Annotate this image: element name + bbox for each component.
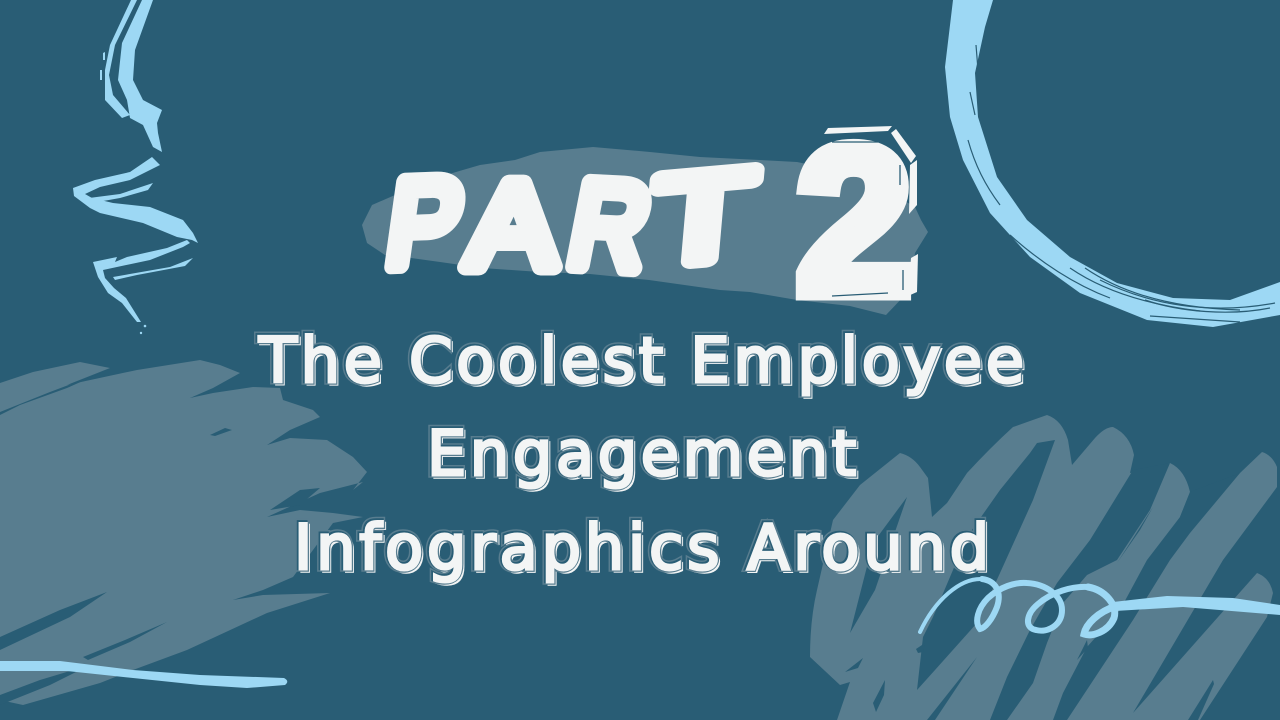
title line 3: Infographics Around	[296, 513, 991, 586]
brush gaps: bottom left	[0, 372, 320, 705]
title line 2: Engagement	[426, 416, 855, 489]
title line 1: shadow, outline, fill: The Coolest Employee	[257, 323, 1023, 396]
title line 2: Engagement	[427, 417, 856, 490]
heading: PART: A	[464, 156, 562, 293]
title line 3: Infographics Around	[293, 510, 988, 583]
title line 1: shadow, outline, fill: The Coolest Employee	[260, 326, 1026, 399]
title line 3: Infographics Around	[293, 510, 988, 583]
swirl line: bottom right	[916, 579, 1280, 653]
heading: PART: P	[379, 154, 470, 293]
circle dry-brush streaks	[968, 45, 1275, 322]
title line 3: Infographics Around	[294, 511, 989, 584]
numeral bevels	[824, 126, 918, 296]
swirl droplet	[916, 643, 925, 653]
title line 2: Engagement	[429, 419, 858, 492]
scribble: bottom right	[810, 415, 1277, 720]
squiggle upper strands	[118, 0, 162, 152]
heading: numeral 2: 2	[796, 103, 912, 338]
brush stroke: behind PART 2	[362, 147, 928, 315]
heading: PART: T	[648, 145, 759, 291]
heading: PART: R	[559, 156, 661, 295]
scribble gaps	[845, 440, 1240, 720]
title line 1: shadow, outline, fill: The Coolest Employee	[258, 324, 1024, 397]
title line 1: shadow, outline, fill: The Coolest Employee	[257, 323, 1023, 396]
squiggle lower strands	[73, 157, 198, 243]
squiggle: top left	[73, 0, 198, 334]
brush circle: top right	[945, 0, 1280, 327]
heading: PART	[379, 145, 759, 295]
title line 2: Engagement	[426, 416, 855, 489]
brush stroke: bottom left	[0, 360, 367, 705]
swoosh line: bottom left	[0, 661, 287, 688]
